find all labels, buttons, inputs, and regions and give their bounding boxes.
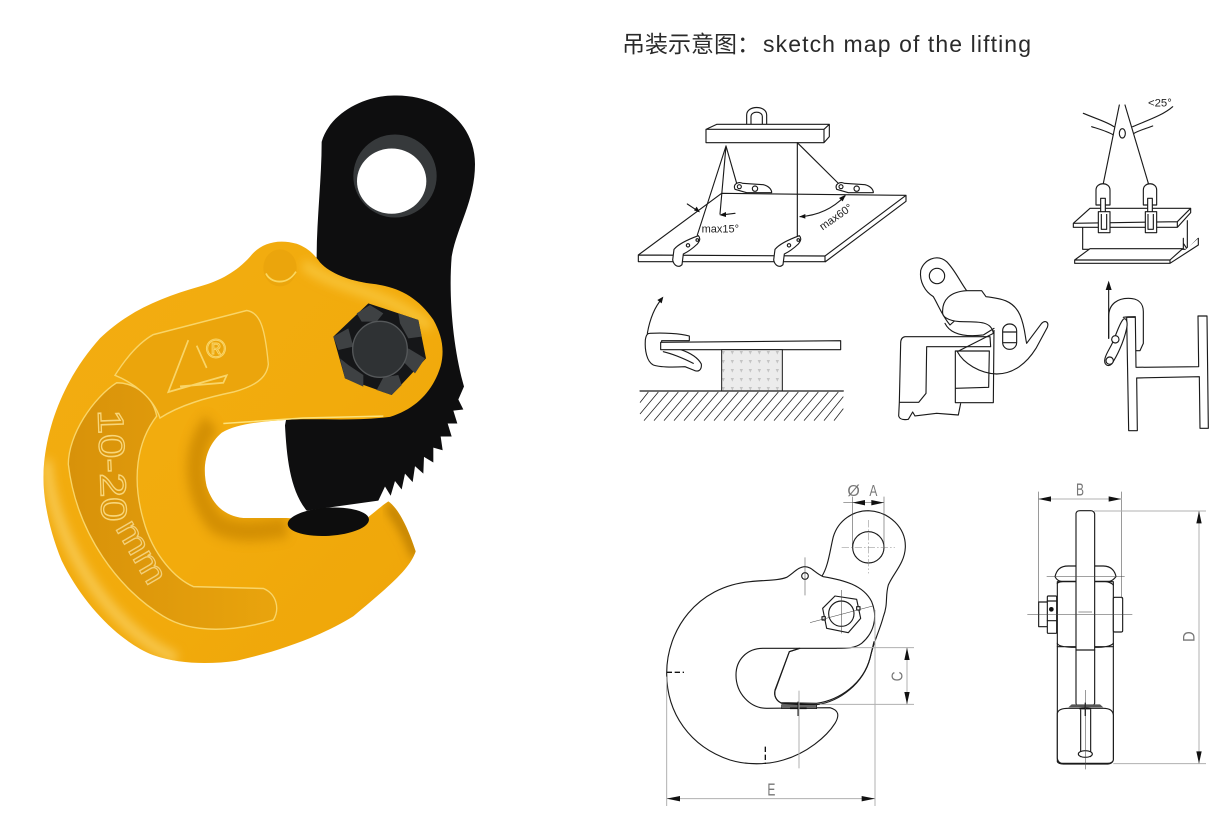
- dimension C: C: [890, 671, 907, 681]
- steel plate: [638, 193, 906, 262]
- plate: [661, 341, 841, 350]
- soft shading on hook: [47, 264, 430, 659]
- dimension E: [667, 610, 875, 806]
- pin hole: [802, 573, 808, 579]
- angle arcs and lifting plate: [1083, 105, 1173, 183]
- diagram: clamp gripping plate edge: [899, 258, 1048, 420]
- angle label: <25°: [1148, 98, 1172, 110]
- hook outline: [943, 291, 1048, 374]
- clamp left: [1096, 184, 1110, 233]
- recessed panel with logo: [115, 311, 268, 418]
- top flange: [1055, 566, 1116, 581]
- front clamps: [673, 236, 801, 266]
- clamp body: [645, 333, 701, 371]
- slings: [697, 143, 840, 237]
- diagram: plate lifted with clamps and beam: [638, 107, 906, 266]
- black cam plate with lifting eye and teeth: [285, 96, 475, 511]
- hatched ground: [640, 391, 843, 421]
- embossed unit marking: mm: [108, 513, 175, 591]
- dimension D: D: [1180, 631, 1199, 642]
- label: max 60 degrees: max60°: [818, 202, 855, 233]
- H-section view: [1127, 316, 1208, 431]
- dimension E: E: [767, 779, 775, 799]
- centre marks: [667, 672, 765, 764]
- support block: [722, 350, 782, 391]
- dimension A: [843, 483, 884, 547]
- dimension drawing: front view: [667, 483, 914, 806]
- dimension B: [1038, 479, 1121, 603]
- embossed size marking: 10-20: [90, 409, 135, 522]
- lifting eye of cam: [920, 258, 967, 325]
- bottom pin: [1068, 703, 1103, 757]
- bolt end: [353, 321, 407, 377]
- dimension A: Ø: [847, 483, 860, 500]
- dimension A: A: [869, 483, 878, 500]
- lifting eye hole: [353, 134, 437, 217]
- clamp right: [1143, 184, 1157, 233]
- up arrow: [1106, 281, 1112, 338]
- dimension D: [1094, 511, 1206, 764]
- hook body: [667, 567, 875, 764]
- outer body: [1057, 581, 1113, 764]
- clamp on H-section: [1105, 298, 1143, 366]
- diagram: I-beam lifted with two clamps: [1073, 98, 1208, 431]
- angle arrows: [687, 195, 846, 219]
- recessed panel with size marking: [68, 383, 277, 629]
- rear clamps: [734, 183, 873, 193]
- logo triangle: [168, 340, 227, 392]
- castle nut and bolt: [333, 303, 426, 395]
- title: sketch map of the lifting: [763, 31, 1031, 57]
- spreader beam and shackle: [706, 107, 829, 143]
- lower cam pivot: [287, 505, 370, 538]
- registered mark: ®: [206, 334, 226, 364]
- centre lines: [1027, 577, 1132, 769]
- central plate: [1076, 511, 1095, 707]
- nut side: [1039, 596, 1057, 633]
- bolt end: [1113, 597, 1123, 632]
- diagram: clamp hooked on plate over support: [640, 297, 843, 421]
- nut and bolt: [810, 590, 873, 633]
- title: 吊装示意图：: [622, 31, 760, 57]
- pivot washer: [782, 705, 817, 709]
- dimension drawing: side view: [1027, 479, 1206, 769]
- nut castellations: [333, 305, 425, 395]
- slot in hook: [1003, 324, 1017, 349]
- product photo: yellow and black lifting clamp: [43, 96, 475, 663]
- dimension C: [820, 648, 914, 704]
- label: max 15 degrees: max15°: [702, 224, 739, 236]
- rotation arrow: [647, 297, 663, 333]
- cam plate: [775, 511, 905, 703]
- dimension B: B: [1076, 479, 1084, 499]
- inner cam edge: [775, 642, 874, 705]
- pin knob: [263, 249, 297, 286]
- plate edge and clamp jaw: [899, 330, 994, 420]
- yellow hook body: [43, 242, 443, 663]
- lifting hole: [853, 532, 884, 563]
- eye in plate: [1119, 129, 1125, 138]
- I-beam: [1073, 208, 1198, 263]
